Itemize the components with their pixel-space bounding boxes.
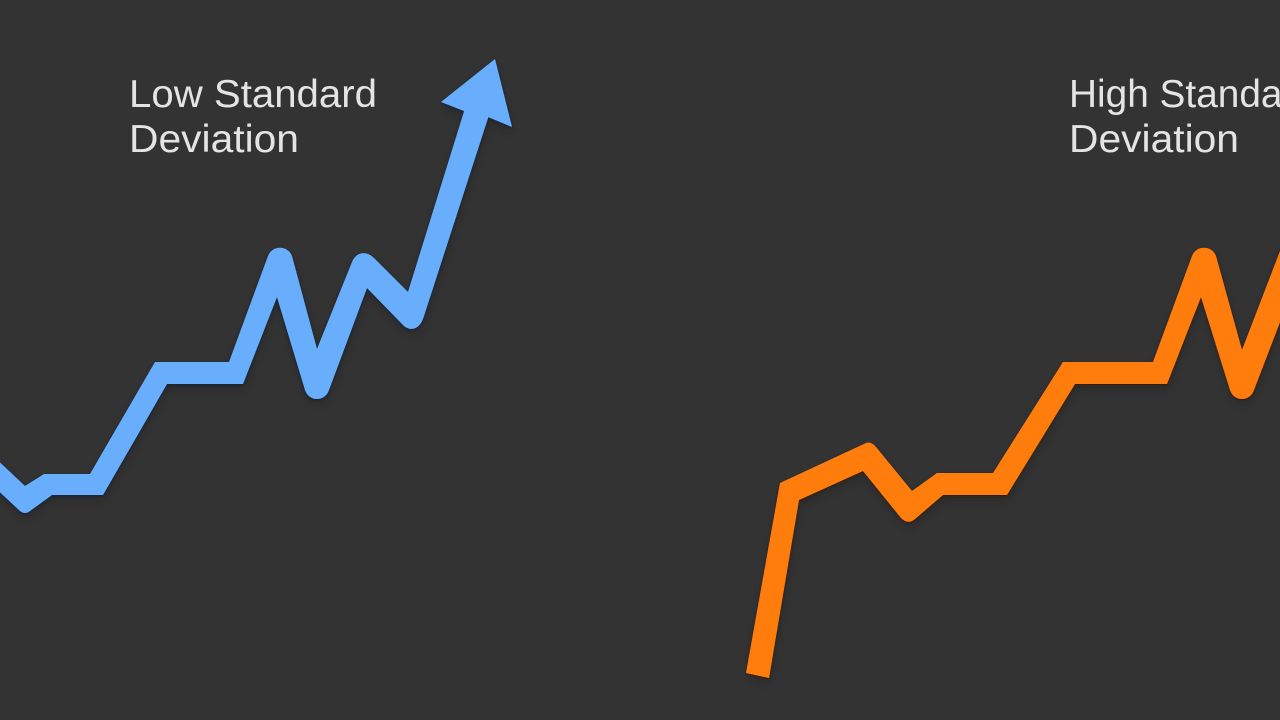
panel: high standard deviation [746, 73, 1280, 678]
panel: low standard deviation [0, 59, 512, 513]
heading: low standard deviation: Deviation [129, 118, 299, 161]
line chart: orange volatile line [746, 225, 1280, 678]
heading: high standard deviation [1069, 73, 1280, 161]
heading: low standard deviation: Low Standard [129, 73, 377, 116]
line chart: blue rising line with arrow [0, 59, 512, 513]
heading: high standard deviation: Deviation [1069, 118, 1239, 161]
line: blue rising line [0, 105, 490, 513]
heading: low standard deviation [129, 73, 377, 161]
arrow: blue arrowhead [441, 59, 512, 127]
